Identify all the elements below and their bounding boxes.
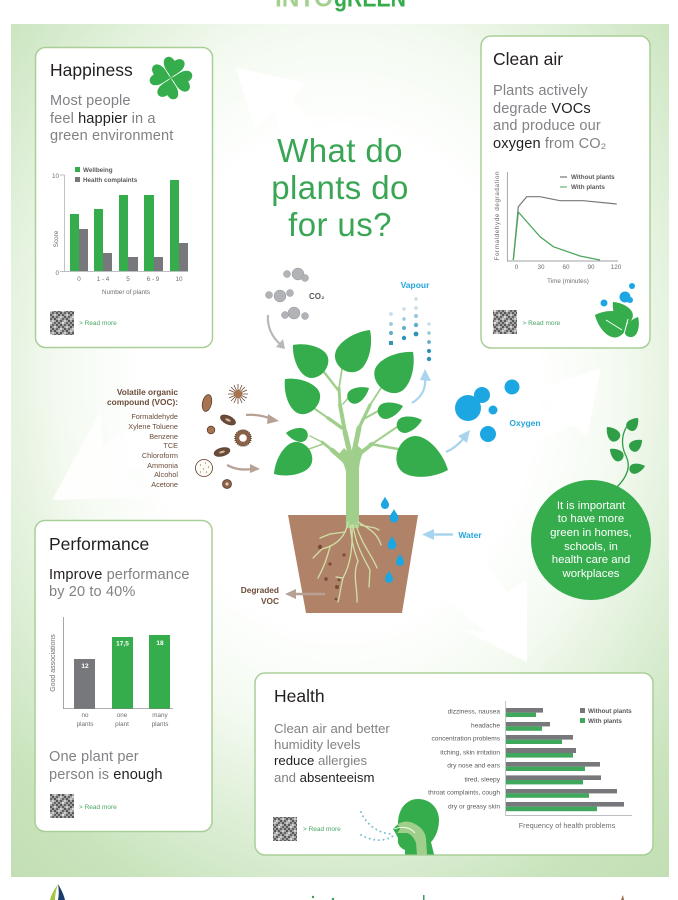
text: clean air message: and produce our — [493, 118, 601, 134]
text: health message: and absenteeism — [274, 770, 374, 785]
leaves — [265, 321, 456, 488]
logo: intogreen footer fragments — [312, 895, 424, 900]
bar chart: wellbeing and complaints: 0 — [77, 276, 81, 283]
bar chart: wellbeing and complaints: Score — [53, 230, 60, 247]
link: read more: > Read more — [522, 320, 561, 327]
logo: partner mark — [621, 895, 624, 900]
label: degraded VOC: VOC — [261, 596, 279, 606]
line chart: formaldehyde degradation: 0 — [515, 264, 519, 271]
icons: VOC particles — [196, 384, 251, 488]
callout: more green: schools, in — [564, 541, 618, 553]
line chart: formaldehyde degradation: With plants — [571, 184, 605, 191]
line chart: formaldehyde degradation — [494, 171, 622, 285]
arrow: white arrow up-left — [236, 68, 372, 250]
text: one plant per person: One plant per — [49, 749, 139, 765]
text: clean air message — [493, 83, 606, 152]
bar chart: wellbeing and complaints: Health complaints — [83, 177, 138, 184]
bar chart: good associations: plants — [152, 721, 168, 728]
icon: oxygen bubbles — [455, 380, 520, 442]
bar chart: good associations: 18 — [156, 640, 164, 647]
text: VOC list: compound (VOC): — [107, 397, 178, 407]
title: for us? — [288, 206, 392, 243]
bar chart: health problems: throat complaints, cough — [428, 790, 500, 797]
roots — [313, 522, 381, 602]
trunk and branches — [309, 369, 398, 528]
arrow: VOC into roots — [227, 464, 260, 473]
line chart: formaldehyde degradation: 60 — [562, 264, 570, 271]
link: read more: > Read more — [79, 804, 117, 811]
link: read more: > Read more — [79, 320, 117, 327]
bar chart: good associations: 12 — [81, 663, 89, 670]
line chart: formaldehyde degradation: Formaldehyde degradation — [494, 171, 501, 260]
bar chart: health problems — [428, 701, 632, 830]
text: VOC list: Formaldehyde — [131, 412, 178, 421]
text: happiness message: feel happier in a — [50, 111, 156, 127]
qr code: clean air — [493, 310, 517, 334]
bar chart: good associations: no — [81, 712, 89, 719]
label: degraded VOC — [241, 585, 279, 606]
bar chart: good associations: plants — [77, 721, 93, 728]
icon: leaves with bubbles — [590, 283, 644, 341]
callout: more green: It is important — [557, 500, 626, 512]
soil particles — [318, 545, 346, 600]
arrow: white arrow down-left — [52, 350, 280, 500]
heading: clean air: Clean air — [493, 49, 563, 69]
text: one plant per person — [49, 749, 163, 783]
callout: more green: to have more — [558, 513, 624, 525]
title: plants do — [271, 169, 409, 206]
bar chart: good associations — [50, 617, 173, 728]
illustration: plant — [265, 321, 456, 613]
label: vapour: Vapour — [401, 280, 430, 290]
panel: clean air — [481, 36, 650, 348]
text: VOC list: TCE — [163, 441, 178, 450]
qr code: health — [273, 817, 297, 841]
qr code: performance — [50, 794, 74, 818]
text: health message — [274, 721, 390, 785]
label: oxygen: Oxygen — [509, 418, 541, 428]
text: VOC list: Chloroform — [142, 451, 178, 460]
text: VOC list: Ammonia — [147, 461, 179, 470]
bar chart: good associations: Good associations — [50, 634, 57, 692]
bar chart: health problems: concentration problems — [431, 736, 501, 743]
text: happiness message — [50, 93, 173, 144]
bar chart: health problems: dizziness, nausea — [448, 709, 500, 716]
bar chart: health problems: dry nose and ears — [447, 763, 501, 770]
bar chart: health problems: With plants — [588, 718, 622, 725]
text: clean air message: Plants actively — [493, 83, 588, 99]
text: one plant per person: person is enough — [49, 767, 163, 783]
panel: health — [255, 673, 653, 855]
logo: partner leaf — [50, 884, 65, 900]
bar chart: good associations: 17,5 — [116, 640, 129, 648]
line chart: formaldehyde degradation: 120 — [611, 264, 622, 271]
text: improve performance: Improve performance — [49, 567, 190, 583]
bar chart: wellbeing and complaints: Wellbeing — [83, 167, 113, 174]
panel: happiness — [36, 48, 212, 348]
qr code: happiness — [50, 311, 74, 335]
bar chart: wellbeing and complaints: 5 — [126, 276, 130, 283]
bar chart: good associations: one — [117, 712, 128, 719]
arrow: white arrow down-right — [390, 490, 527, 662]
callout: more green: green in homes, — [550, 527, 632, 539]
label: degraded VOC: Degraded — [241, 585, 279, 595]
callout: more green: health care and — [552, 554, 630, 566]
bar chart: health problems: tired, sleepy — [464, 777, 501, 784]
bar chart: health problems: dry or greasy skin — [448, 804, 500, 811]
bar chart: wellbeing and complaints: Number of plants — [102, 289, 150, 296]
bar chart: wellbeing and complaints: 10 — [175, 276, 183, 283]
bar chart: good associations: many — [152, 712, 169, 719]
bar chart: wellbeing and complaints: 10 — [52, 173, 59, 180]
text: clean air message: oxygen from CO₂ — [493, 136, 606, 152]
line chart: formaldehyde degradation: Time (minutes) — [547, 278, 589, 285]
callout: more green — [531, 480, 651, 600]
bar chart: health problems: Without plants — [588, 708, 632, 715]
bar chart: wellbeing and complaints: 6 - 9 — [147, 276, 160, 283]
bar chart: wellbeing and complaints — [52, 167, 188, 296]
arrow: oxygen out — [446, 430, 470, 452]
label: water: Water — [458, 530, 482, 540]
title — [271, 132, 409, 243]
heading: performance: Performance — [49, 534, 149, 554]
text: VOC list: Volatile organic — [117, 387, 178, 397]
text: health message: humidity levels — [274, 737, 361, 752]
pot — [288, 515, 418, 613]
text: happiness message: Most people — [50, 93, 131, 109]
arrow: VOC into leaves — [246, 414, 279, 424]
icon: water drops — [381, 496, 404, 583]
text: VOC list: Alcohol — [154, 470, 178, 479]
text: clean air message: degrade VOCs — [493, 101, 591, 117]
logo: InfoGreen header — [275, 0, 406, 12]
line chart: formaldehyde degradation: 30 — [537, 264, 545, 271]
panel: performance — [35, 520, 212, 832]
icon: vapour droplets — [389, 297, 431, 361]
text: improve performance: by 20 to 40% — [49, 584, 135, 600]
arrow: water in — [422, 529, 453, 540]
heading: happiness: Happiness — [50, 60, 133, 80]
text: VOC list: Xylene Toluene — [128, 422, 178, 431]
label: CO2: CO₂ — [309, 292, 325, 301]
heading: health: Health — [274, 686, 325, 706]
text: health message: reduce allergies — [274, 753, 368, 768]
text: health message: Clean air and better — [274, 721, 390, 736]
link: read more: > Read more — [303, 826, 341, 833]
icon: four-leaf clover — [147, 54, 195, 102]
arrow: white arrow up-right — [433, 368, 601, 490]
text: improve performance — [49, 567, 190, 600]
arrow: degraded VOC out — [285, 589, 325, 599]
arrow: vapour up — [412, 369, 431, 403]
label: carbon dioxide bubbles — [266, 268, 308, 320]
title: What do — [277, 132, 403, 169]
bar chart: health problems: itching, skin irritation — [440, 750, 500, 757]
text: VOC list — [107, 387, 179, 489]
line chart: formaldehyde degradation: 90 — [587, 264, 595, 271]
icon: sprout — [602, 414, 646, 487]
line chart: formaldehyde degradation: Without plants — [571, 174, 615, 181]
text: happiness message: green environment — [50, 128, 173, 144]
callout: more green: workplaces — [562, 568, 620, 580]
bar chart: good associations: plant — [115, 721, 129, 728]
bar chart: wellbeing and complaints: 0 — [55, 270, 59, 277]
bar chart: health problems: Frequency of health problems — [519, 821, 616, 830]
arrow: CO2 into plant — [268, 315, 285, 349]
bar chart: health problems: headache — [471, 723, 500, 730]
icon: head and airway — [361, 799, 439, 854]
bar chart: wellbeing and complaints: 1 - 4 — [97, 276, 110, 283]
text: VOC list: Acetone — [151, 480, 178, 489]
text: VOC list: Benzene — [149, 432, 178, 441]
